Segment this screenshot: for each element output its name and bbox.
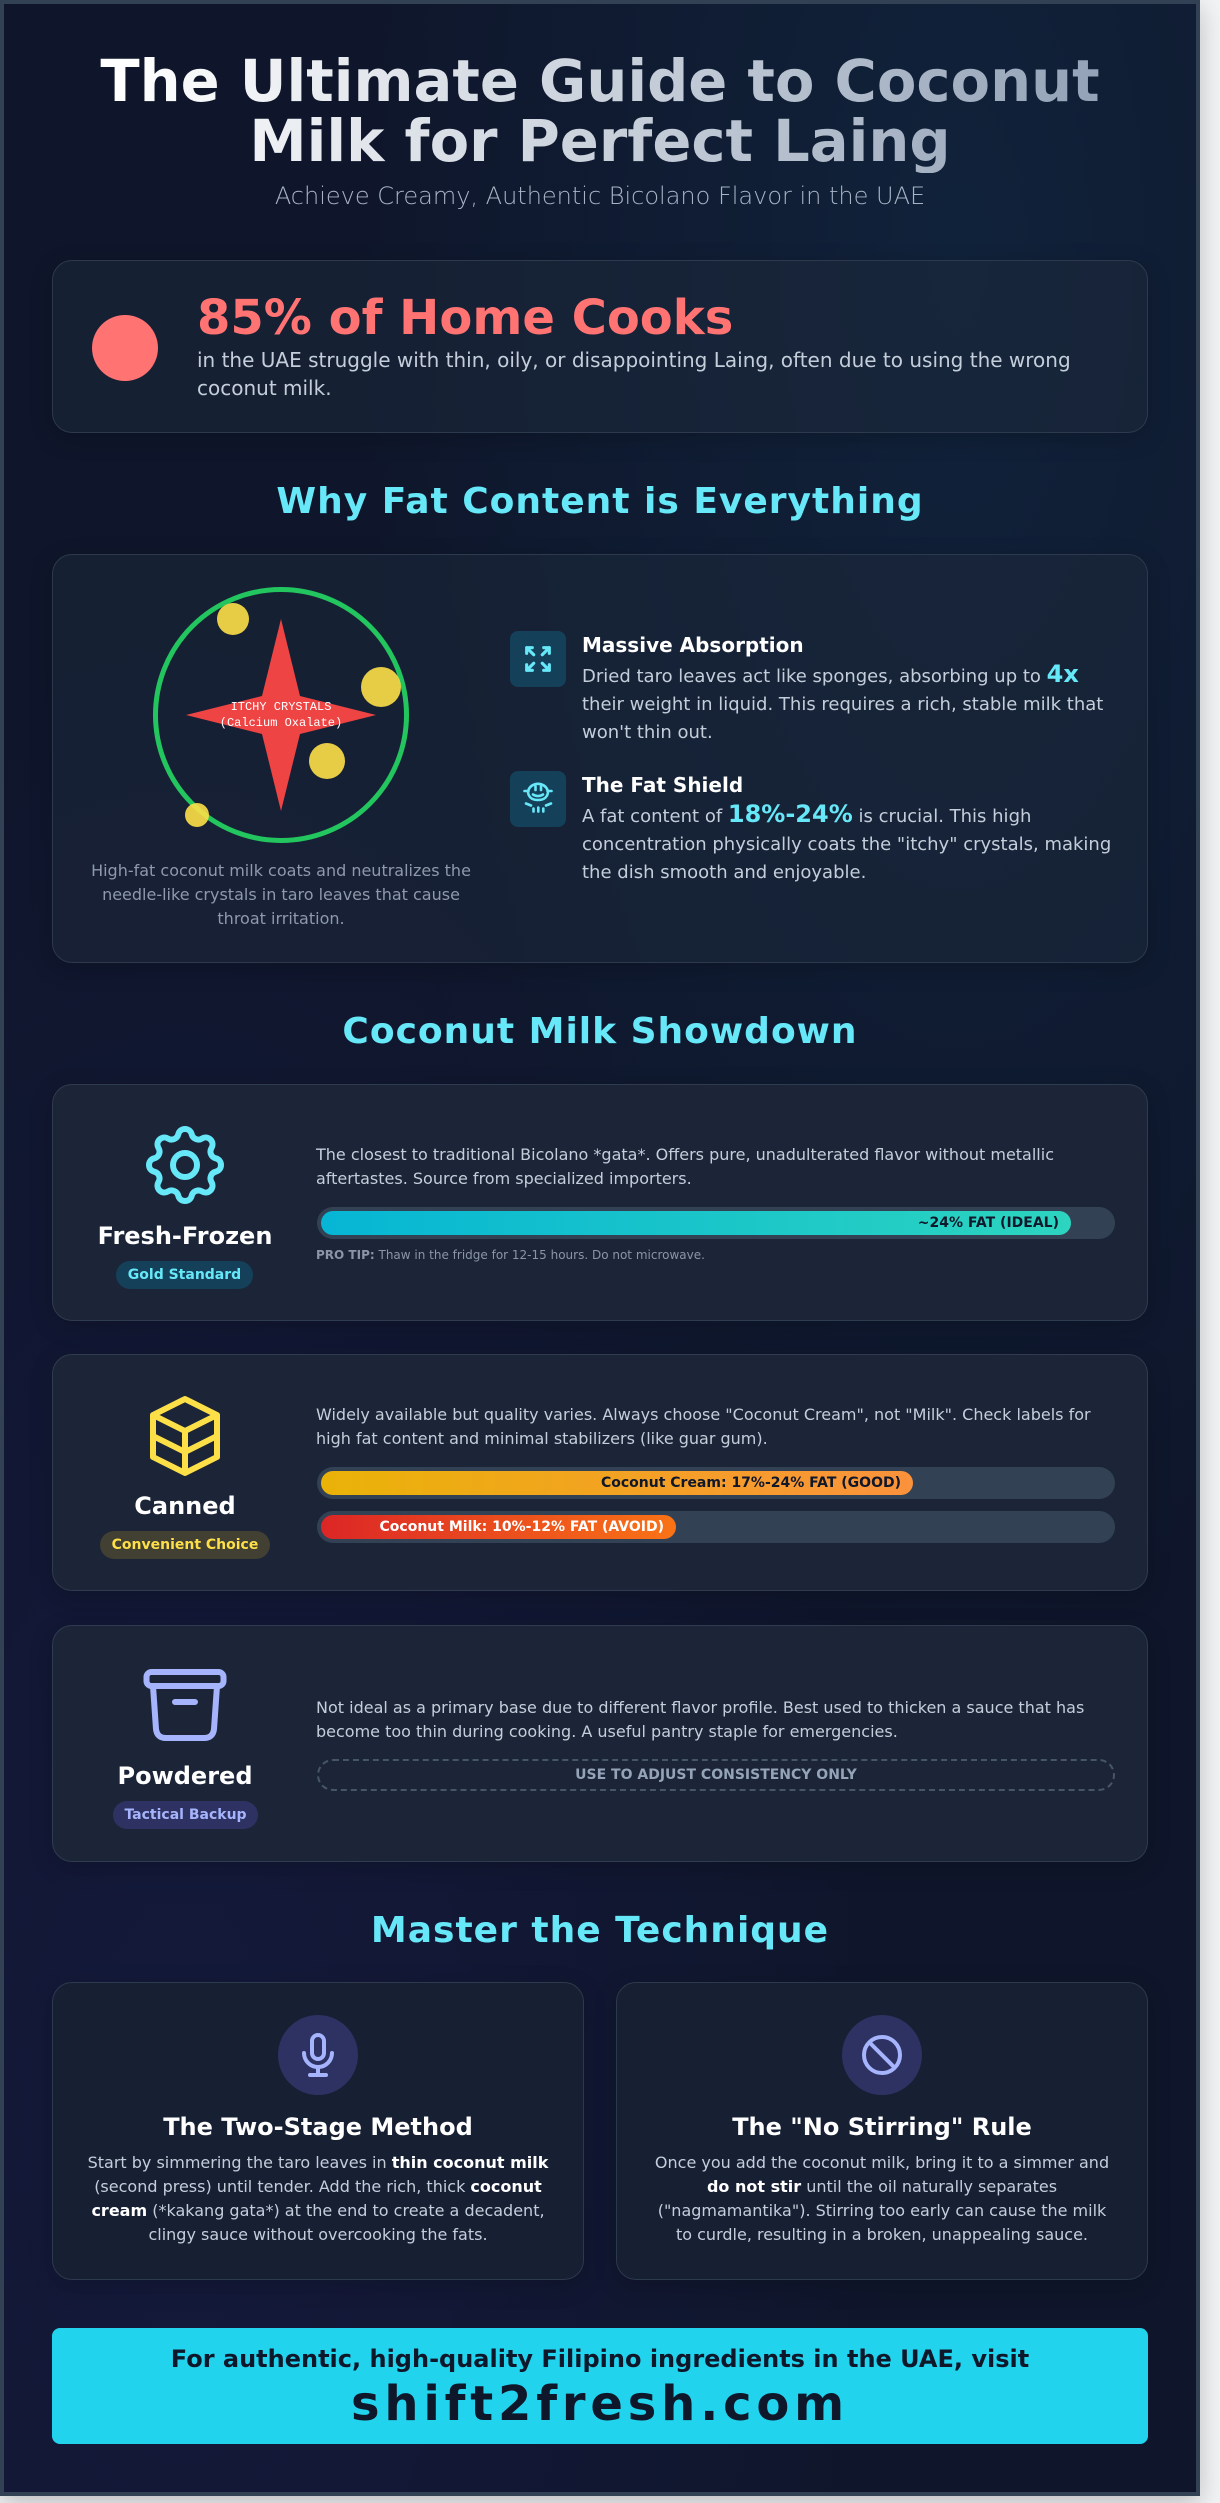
heading: showdown: Coconut Milk Showdown [342,1011,858,1052]
badge: tactical backup [113,1801,258,1829]
text: Start by simmering the taro leaves in thin coconut milk [88,2153,548,2172]
text: to curdle, resulting in a broken, unappealing sauce. [676,2225,1088,2244]
card: fresh-frozen [52,1084,1148,1321]
text: fresh-frozen: aftertastes. Source from specialized importers. [316,1169,692,1188]
text [655,2153,1109,2244]
badge: convenient choice: Convenient Choice [112,1537,258,1553]
icon: gear [146,1126,224,1204]
bar: ideal fat: ~24% FAT (IDEAL) [918,1215,1059,1231]
bar: coconut cream [317,1467,1115,1499]
badge: tactical backup: Tactical Backup [124,1807,247,1823]
name: powdered: Powdered [118,1762,252,1790]
text: fat shield [582,800,1111,883]
text: fresh-frozen [316,1145,1054,1188]
stat description: in the UAE struggle with thin, oily, or disappointing Laing, often due to using the wrong [197,348,1071,372]
text: fat shield: the dish smooth and enjoyable. [582,862,866,883]
stat description: coconut milk. [197,376,332,400]
stat headline: 85% of Home Cooks [197,290,733,346]
text: powdered [316,1698,1084,1741]
text: fat shield: concentration physically coats the "itchy" crystals, making [582,834,1111,855]
text: ("nagmamantika"). Stirring too early can cause the milk [658,2201,1106,2220]
icon: expand arrows [510,631,566,687]
subtitle: Achieve Creamy, Authentic Bicolano Flavor in the UAE [275,182,925,210]
text: massive absorption: won't thin out. [582,722,713,743]
text: do not stir until the oil naturally separates [707,2177,1057,2196]
icon: stacked box [150,1396,220,1476]
heading: The "No Stirring" Rule [732,2113,1032,2141]
title [0,52,1200,172]
dashed note [317,1759,1115,1791]
call to action text: For authentic, high-quality Filipino ingredients in the UAE, visit [171,2345,1029,2373]
name: fresh-frozen: Fresh-Frozen [98,1222,272,1250]
icon: storage box [144,1669,226,1741]
text: (second press) until tender. Add the rich, thick coconut [94,2177,542,2196]
text: powdered: Not ideal as a primary base due to different flavor profile. Best used to thicken a sauce that has [316,1698,1084,1717]
heading: fat shield: The Fat Shield [582,773,743,797]
bar: coconut cream: Coconut Cream: 17%-24% FAT (GOOD) [601,1475,901,1491]
heading: massive absorption: Massive Absorption [582,633,804,657]
text: fresh-frozen: The closest to traditional Bicolano *gata*. Offers pure, unadulterated flavor without metallic [316,1145,1054,1164]
diagram caption: throat irritation. [217,909,345,928]
stat description [197,348,1071,400]
diagram caption: High-fat coconut milk coats and neutralizes the [91,861,471,880]
title: The Ultimate Guide to Coconut [100,48,1100,114]
diagram: crystals and fat shield: ITCHY CRYSTALS [231,700,331,714]
bar: coconut milk: Coconut Milk: 10%-12% FAT (AVOID) [380,1519,664,1535]
badge: gold standard: Gold Standard [128,1267,241,1283]
text: massive absorption [582,660,1103,743]
text: canned: high fat content and minimal stabilizers (like guar gum). [316,1429,768,1448]
text: massive absorption: Dried taro leaves act like sponges, absorbing up to 4x [582,660,1079,688]
name: canned: Canned [134,1492,236,1520]
icon: no symbol [842,2015,922,2095]
text: Once you add the coconut milk, bring it to a simmer and [655,2153,1109,2172]
text: powdered: become too thin during cooking. A useful pantry staple for emergencies. [316,1722,898,1741]
heading: technique: Master the Technique [371,1910,829,1951]
panel: statistic [52,260,1148,433]
text: canned [316,1405,1091,1448]
card: no stirring rule [616,1982,1148,2280]
diagram: crystals and fat shield: (Calcium Oxalate) [220,716,342,730]
heading: The Two-Stage Method [163,2113,473,2141]
text: canned: Widely available but quality varies. Always choose "Coconut Cream", not "Milk". Check labels for [316,1405,1091,1424]
diagram caption [91,861,471,928]
call to action [52,2328,1148,2444]
diagram: crystals and fat shield [153,587,409,843]
bar: ideal fat [317,1207,1115,1239]
badge: gold standard [116,1261,253,1289]
icon: microphone [278,2015,358,2095]
website: shift2fresh.com [351,2376,849,2432]
badge: convenient choice [100,1531,270,1559]
card: canned [52,1354,1148,1591]
text: cream (*kakang gata*) at the end to create a decadent, [91,2201,545,2220]
heading: why fat content: Why Fat Content is Everything [276,481,924,522]
panel: fat content [52,554,1148,963]
card: powdered [52,1625,1148,1862]
text: massive absorption: their weight in liquid. This requires a rich, stable milk that [582,694,1103,715]
text: fat shield: A fat content of 18%-24% is crucial. This high [582,800,1031,828]
card: two-stage method [52,1982,584,2280]
pro tip: PRO TIP: Thaw in the fridge for 12-15 hours. Do not microwave. [316,1248,705,1262]
text: clingy sauce without overcooking the fats. [148,2225,488,2244]
icon: shield smile [510,771,566,827]
dashed note: USE TO ADJUST CONSISTENCY ONLY [575,1767,857,1783]
bar: coconut milk [317,1511,1115,1543]
diagram caption: needle-like crystals in taro leaves that cause [102,885,460,904]
title: Milk for Perfect Laing [249,108,951,175]
icon: red dot [92,315,158,381]
text [88,2153,549,2244]
